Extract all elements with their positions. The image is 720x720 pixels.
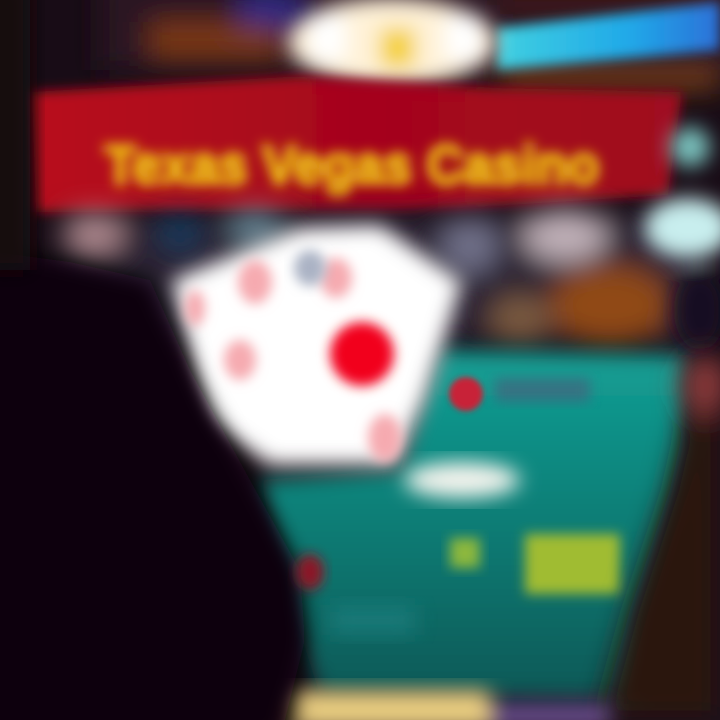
table score block <box>525 534 620 594</box>
foreground person silhouette <box>0 0 324 720</box>
bottom yellow light <box>250 690 610 720</box>
right bright spots <box>644 127 720 350</box>
blue light strip <box>497 2 720 70</box>
table marker: red circle <box>449 377 483 411</box>
red banner <box>32 76 682 212</box>
grey pip <box>294 250 326 286</box>
lower card tail <box>404 462 520 498</box>
banner text: Texas Vegas Casino <box>104 133 600 196</box>
table label <box>495 378 590 402</box>
top ceiling <box>100 0 720 90</box>
small pale pips <box>185 258 402 462</box>
hand accent <box>296 554 324 590</box>
large red pip <box>330 322 394 386</box>
chandelier <box>288 0 496 86</box>
right foreground silhouette <box>600 350 720 720</box>
table square <box>450 538 480 568</box>
fanned white cards <box>172 225 520 498</box>
teal table <box>260 350 685 700</box>
table faint label <box>330 605 415 635</box>
crowd <box>60 209 700 345</box>
